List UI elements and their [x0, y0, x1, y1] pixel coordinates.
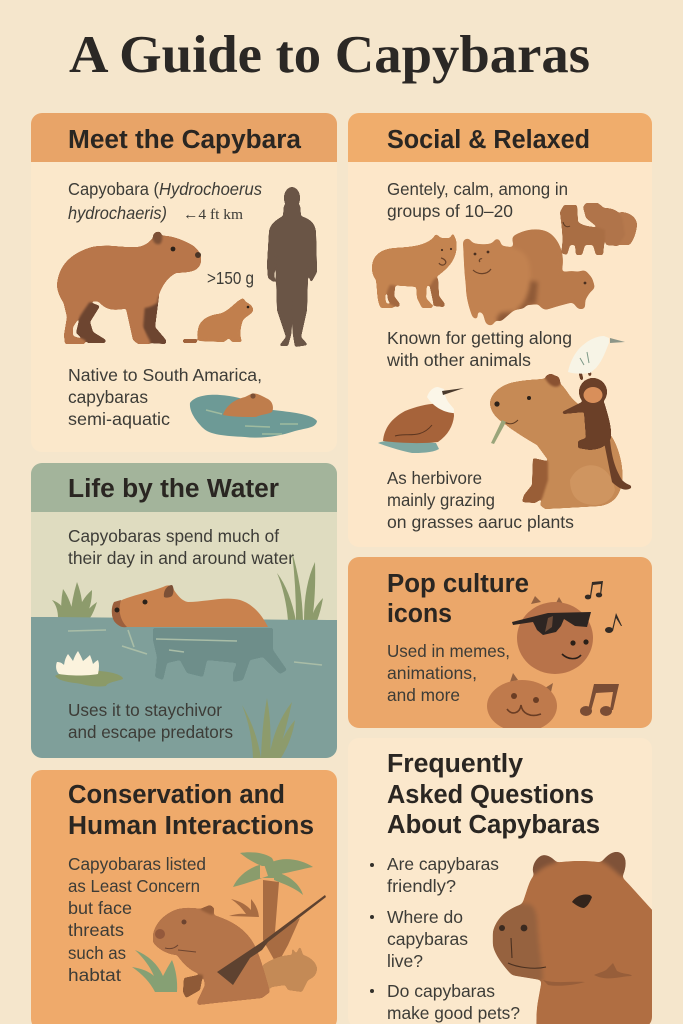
heading: faq: Asked Questions [387, 781, 594, 809]
text: conservation status [68, 854, 206, 985]
icon: duck [378, 387, 464, 453]
text: species name [68, 179, 262, 223]
text: native range [68, 365, 262, 429]
panel: pop culture icons [348, 557, 652, 732]
text: diet [387, 468, 574, 532]
list: questions: Are capybaras [387, 854, 499, 874]
list: questions: friendly? [387, 876, 456, 896]
icon: adult capybara [57, 232, 201, 344]
icon: capybara pair with baby [463, 229, 595, 326]
heading: pop culture icons: Pop culture [387, 570, 529, 598]
icon: green plant [132, 950, 177, 992]
text: conservation status: such as [68, 943, 126, 963]
text: native range: Native to South Amarica, [68, 365, 262, 385]
heading: social and relaxed: Social & Relaxed [387, 126, 590, 154]
list: questions: Where do [387, 907, 463, 927]
text: water time [68, 526, 294, 568]
text: other animals: with other animals [386, 350, 531, 370]
text: group size: Gentely, calm, among in [387, 179, 568, 199]
list: questions: live? [387, 951, 423, 971]
text: conservation status: but face [68, 898, 132, 918]
icon: water lily [55, 651, 123, 687]
icon: music note bottom [580, 684, 619, 716]
icon: capybara with monkey and bird [490, 336, 631, 509]
text: diet: mainly grazing [387, 490, 495, 510]
text: conservation status: as Least Concern [68, 876, 200, 896]
icon: reeds and bush on the bank [52, 552, 323, 621]
heading: life by the water: Life by the Water [68, 475, 279, 503]
title: A Guide to Capybaras [69, 26, 590, 84]
heading: pop culture icons [387, 570, 529, 628]
icon: human silhouette [267, 187, 317, 347]
icon: small capybara [258, 946, 317, 992]
icon: reeds in water [242, 698, 295, 758]
text: memes: animations, [387, 663, 477, 683]
text: water time: their day in and around water [68, 548, 294, 568]
text: other animals: Known for getting along [387, 328, 572, 348]
text: diet: on grasses aaruc plants [387, 512, 574, 532]
text: species name: Capyobara (Hydrochoerus [68, 179, 262, 199]
icon: capybara in pond [190, 393, 317, 438]
icon: swimming capybara [68, 585, 322, 682]
text: diet: As herbivore [387, 468, 482, 488]
icon: capybara with sunglasses [512, 596, 593, 674]
panel: frequently asked questions [370, 753, 652, 1024]
heading: pop culture icons: icons [387, 600, 452, 628]
text: predators: Uses it to staychivor [68, 700, 222, 720]
icon: rifle [217, 895, 326, 985]
heading: conservation and human interactions: Human Interactions [68, 812, 314, 840]
text: group size [387, 179, 568, 221]
list: questions: make good pets? [387, 1003, 520, 1023]
text: water time: Capyobaras spend much of [68, 526, 279, 546]
text: other animals [386, 328, 572, 370]
icon: palm tree [233, 852, 313, 965]
text: conservation status: threats [68, 920, 124, 940]
list: questions [370, 854, 520, 1023]
heading: faq [387, 750, 600, 839]
panel: conservation and human interactions [31, 770, 337, 1024]
icon: brown plant [229, 899, 259, 917]
heading: conservation and human interactions: Conservation and [68, 781, 285, 809]
panel: life by the water [31, 463, 337, 758]
icon: capybara group top right [560, 203, 637, 255]
icon: music note top [585, 581, 603, 599]
icon: smiling capybara [487, 673, 557, 732]
icon: baby capybara [183, 298, 253, 343]
icon: capybara [153, 905, 270, 1005]
heading: faq: Frequently [387, 750, 524, 778]
text: group size: groups of 10–20 [387, 201, 513, 221]
icon: capybara portrait [493, 852, 670, 1024]
heading: conservation and human interactions [68, 781, 314, 840]
text: weight label: >150 g [207, 268, 254, 288]
panel: meet the capybara [31, 113, 337, 452]
text: conservation status: Capyobaras listed [68, 854, 206, 874]
text: height label: ←4 ft km [183, 207, 243, 223]
text: native range: capybaras [68, 387, 148, 407]
heading: meet the capybara: Meet the Capybara [68, 126, 302, 154]
panel: social and relaxed [348, 113, 652, 547]
text: memes [387, 641, 510, 705]
heading: faq: About Capybaras [387, 811, 600, 839]
icon: music note middle [605, 613, 622, 633]
text: memes: and more [387, 685, 460, 705]
text: predators: and escape predators [68, 722, 233, 742]
text: memes: Used in memes, [387, 641, 510, 661]
text: species name: hydrochaeris) [68, 203, 167, 223]
text: native range: semi-aquatic [68, 409, 170, 429]
icon: capybara left [372, 233, 457, 308]
text: conservation status: habtat [68, 965, 121, 985]
text: predators [68, 700, 233, 742]
list: questions: capybaras [387, 929, 468, 949]
list: questions: Do capybaras [387, 981, 495, 1001]
